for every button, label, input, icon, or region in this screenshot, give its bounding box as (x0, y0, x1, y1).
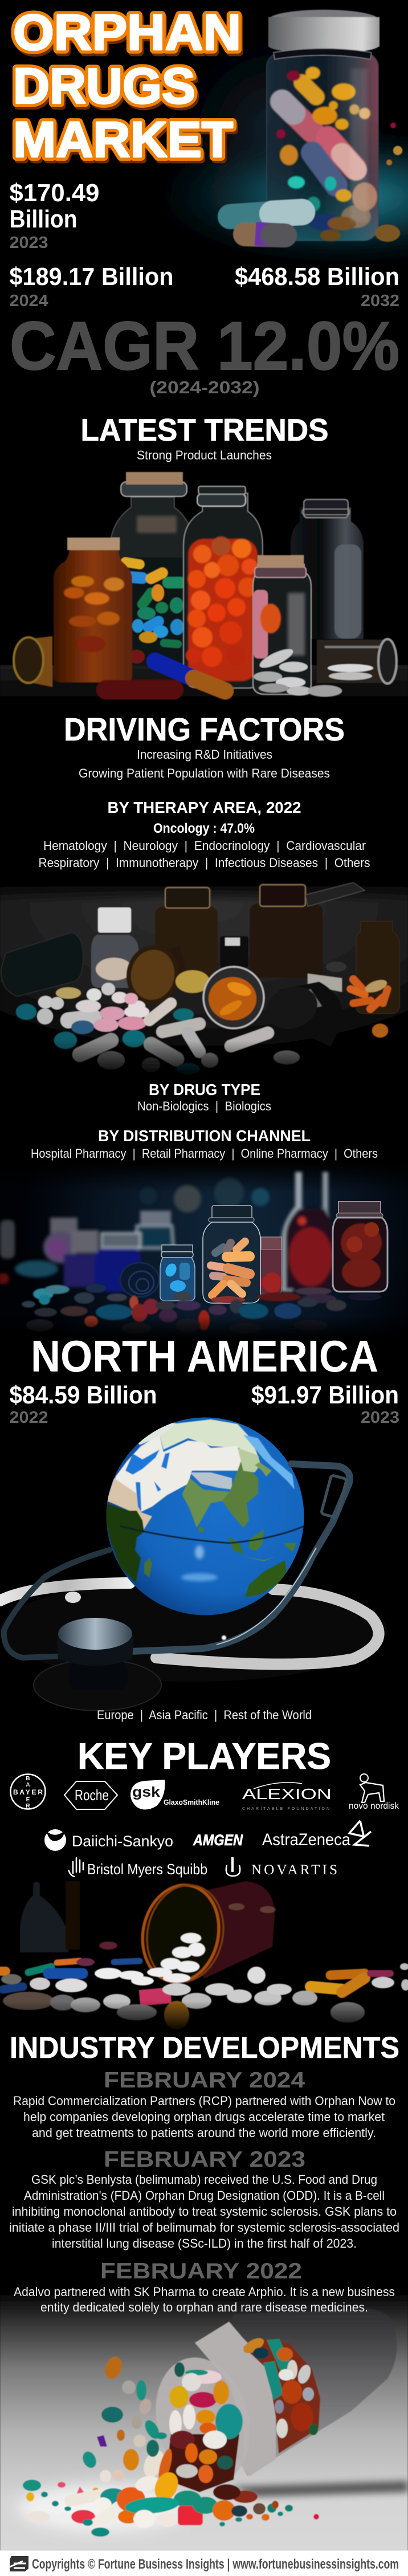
illustration: medicine bottles (0, 472, 408, 705)
logos row 2 (44, 1821, 371, 1851)
development: February 2023: initiate a phase II/III trial of belimumab for systemic sclerosis-associated (9, 2220, 399, 2235)
back row, left to right (0, 1220, 15, 1259)
logo: Bristol Myers Squibb: Bristol Myers Squibb (87, 1861, 207, 1878)
floor pebbles (22, 1272, 382, 1334)
logo: Amgen: AMGEN (193, 1832, 243, 1849)
stat: north america 2022: 2022 (9, 1409, 48, 1427)
coil (120, 1263, 159, 1297)
section: by drug type (137, 1081, 271, 1113)
stat: 2024 market size: $189.17 Billion (9, 263, 173, 291)
heading: north america: NORTH AMERICA (31, 1331, 378, 1381)
stat: 2023 market size: $170.49 (9, 179, 99, 207)
stat: 2032 market size: 2032 (361, 292, 399, 310)
logo: Daiichi-Sankyo: Daiichi-Sankyo (72, 1833, 173, 1850)
logo: GlaxoSmithKline: gsk (132, 1784, 160, 1800)
logo: Alexion (242, 1783, 332, 1811)
logo: Novo Nordisk (349, 1774, 399, 1811)
illustration: colourful spilled pills (0, 2292, 408, 2550)
stat: 2032 market size: $468.58 Billion (235, 263, 399, 291)
section: by therapy area: BY THERAPY AREA, 2022 (107, 799, 301, 816)
logo: Alexion: CHARITABLE FOUNDATION (242, 1807, 329, 1811)
heading: driving factors: DRIVING FACTORS (64, 711, 345, 748)
pills inside the bottle (241, 2335, 320, 2453)
development: February 2024: Rapid Commercialization Partners (RCP) partnered with Orphan Now to (13, 2094, 395, 2108)
heading: key players: KEY PLAYERS (77, 1735, 331, 1777)
stat: 2023 market size: 2023 (9, 234, 48, 252)
development: February 2023: interstitial lung disease (SSc-ILD) in the first half of 2023. (52, 2236, 357, 2251)
driver text: Growing Patient Population with Rare Diseases (79, 766, 330, 780)
development: February 2022: Adalvo partnered with SK Pharma to create Arphio. It is a new business (14, 2285, 395, 2299)
logo: AstraZeneca: AstraZeneca (262, 1830, 350, 1849)
section: by drug type: BY DRUG TYPE (149, 1081, 260, 1098)
driver text (79, 747, 330, 780)
title: ORPHAN (13, 4, 241, 60)
title: MARKET (13, 111, 233, 168)
title: ORPHAN (15, 7, 243, 63)
illustration: globe and stethoscope (0, 1417, 387, 1711)
neck band (195, 2322, 276, 2476)
development: February 2023: FEBRUARY 2023 (104, 2147, 305, 2172)
logo: GlaxoSmithKline: GlaxoSmithKline (164, 1798, 219, 1806)
logo: Daiichi-Sankyo (44, 1829, 173, 1851)
glass mouth (142, 2347, 264, 2495)
footer (0, 2550, 408, 2576)
section: by drug type: Non-Biologics | Biologics (137, 1099, 271, 1113)
logo: Roche (64, 1781, 117, 1809)
pills in the bottle mouth (140, 2362, 243, 2483)
bottle body (205, 2309, 397, 2476)
illustration: spilled pill bottle (0, 1878, 408, 2032)
development: February 2024: and get treatments to patients around the world more efficiently. (32, 2126, 376, 2140)
development: February 2023: inhibiting monoclonal antibody to treat systemic sclerosis. GSK plans to (12, 2204, 397, 2219)
front pink jar (260, 1237, 281, 1294)
right red jar (333, 1202, 387, 1292)
development: February 2024: help companies developing orphan drugs accelerate time to market (23, 2110, 385, 2124)
development: February 2023: Administration's (FDA) Orphan Drug Designation (ODD). It is a B-cell (24, 2188, 385, 2203)
logo: Bayer: A (26, 1782, 30, 1788)
logo: Bayer (10, 1774, 46, 1809)
title: DRUGS (13, 58, 195, 114)
illustration: scattered bottles and pills (0, 882, 408, 1078)
stat: CAGR: (2024-2032) (149, 377, 260, 397)
falling pills (80, 2354, 167, 2483)
section: by therapy area: Oncology : 47.0% (153, 821, 255, 836)
spilled pill pile (23, 2468, 319, 2537)
title: MARKET (13, 111, 233, 168)
title: DRUGS (13, 58, 195, 114)
stat: north america 2023: 2023 (361, 1409, 399, 1427)
illustration: blurred pharmacy jars (0, 1163, 408, 1340)
stat: 2023 market size (9, 179, 99, 252)
trend text: Strong Product Launches (137, 448, 272, 462)
logo: Novartis (226, 1857, 337, 1878)
development: February 2023: GSK plc’s Benlysta (belimumab) received the U.S. Food and Drug (31, 2172, 377, 2187)
other regions text: Europe | Asia Pacific | Rest of the World (97, 1708, 312, 1722)
central clear jar (203, 1206, 260, 1303)
development: February 2023 (9, 2147, 399, 2251)
development: February 2022: FEBRUARY 2022 (100, 2259, 302, 2284)
logo: Alexion: ALEXION (242, 1785, 332, 1802)
stat: north america 2022: $84.59 Billion (9, 1381, 157, 1409)
title: ORPHAN (13, 4, 241, 60)
stat: north america 2023 (251, 1381, 399, 1427)
heading: latest trends: LATEST TRENDS (81, 412, 328, 447)
section: by distribution channel (31, 1127, 378, 1161)
logo: GlaxoSmithKline (130, 1780, 219, 1810)
logo: AstraZeneca (262, 1821, 371, 1849)
small blue jar (160, 1245, 195, 1301)
title: MARKET (15, 114, 235, 170)
logos row 1 (10, 1774, 399, 1811)
section: by therapy area (39, 799, 370, 870)
development: February 2024 (13, 2068, 395, 2140)
section: by distribution channel: BY DISTRIBUTION CHANNEL (98, 1127, 311, 1145)
logos row 3 (68, 1857, 337, 1878)
illustration: pill jar (142, 0, 408, 268)
stat: 2024 market size (9, 263, 173, 310)
icon: Fortune Business Insights logo (10, 2556, 28, 2571)
logo: Novo Nordisk: novo nordisk (349, 1801, 399, 1811)
driver text: Increasing R&D Initiatives (137, 747, 272, 762)
stat: north america 2023: $91.97 Billion (251, 1381, 399, 1409)
development: February 2022: entity dedicated solely to orphan and rare disease medicines. (40, 2300, 368, 2314)
section: by therapy area: Hematology | Neurology | Endocrinology | Cardiovascular (43, 839, 366, 853)
stat: 2032 market size (235, 263, 399, 310)
logo: Bayer: E (26, 1797, 30, 1803)
logo: Bayer: R (26, 1803, 30, 1809)
logo: Novartis: NOVARTIS (251, 1862, 337, 1878)
logo: Bayer: BAYER (13, 1788, 43, 1796)
section: by distribution channel: Hospital Pharmacy | Retail Pharmacy | Online Pharmacy | Others (31, 1146, 378, 1161)
stat: 2023 market size: Billion (9, 205, 77, 233)
development: February 2024: FEBRUARY 2024 (104, 2068, 305, 2093)
logo: Bayer: B (26, 1776, 30, 1782)
development: February 2022 (14, 2259, 395, 2314)
stat: 2024 market size: 2024 (9, 292, 48, 310)
logo: Roche: Roche (75, 1786, 109, 1804)
stat: north america 2022 (9, 1381, 157, 1427)
title: DRUGS (15, 60, 197, 117)
title (13, 4, 243, 170)
logo: Bristol Myers Squibb (68, 1858, 207, 1878)
section: by therapy area: Respiratory | Immunotherapy | Infectious Diseases | Others (39, 856, 370, 870)
